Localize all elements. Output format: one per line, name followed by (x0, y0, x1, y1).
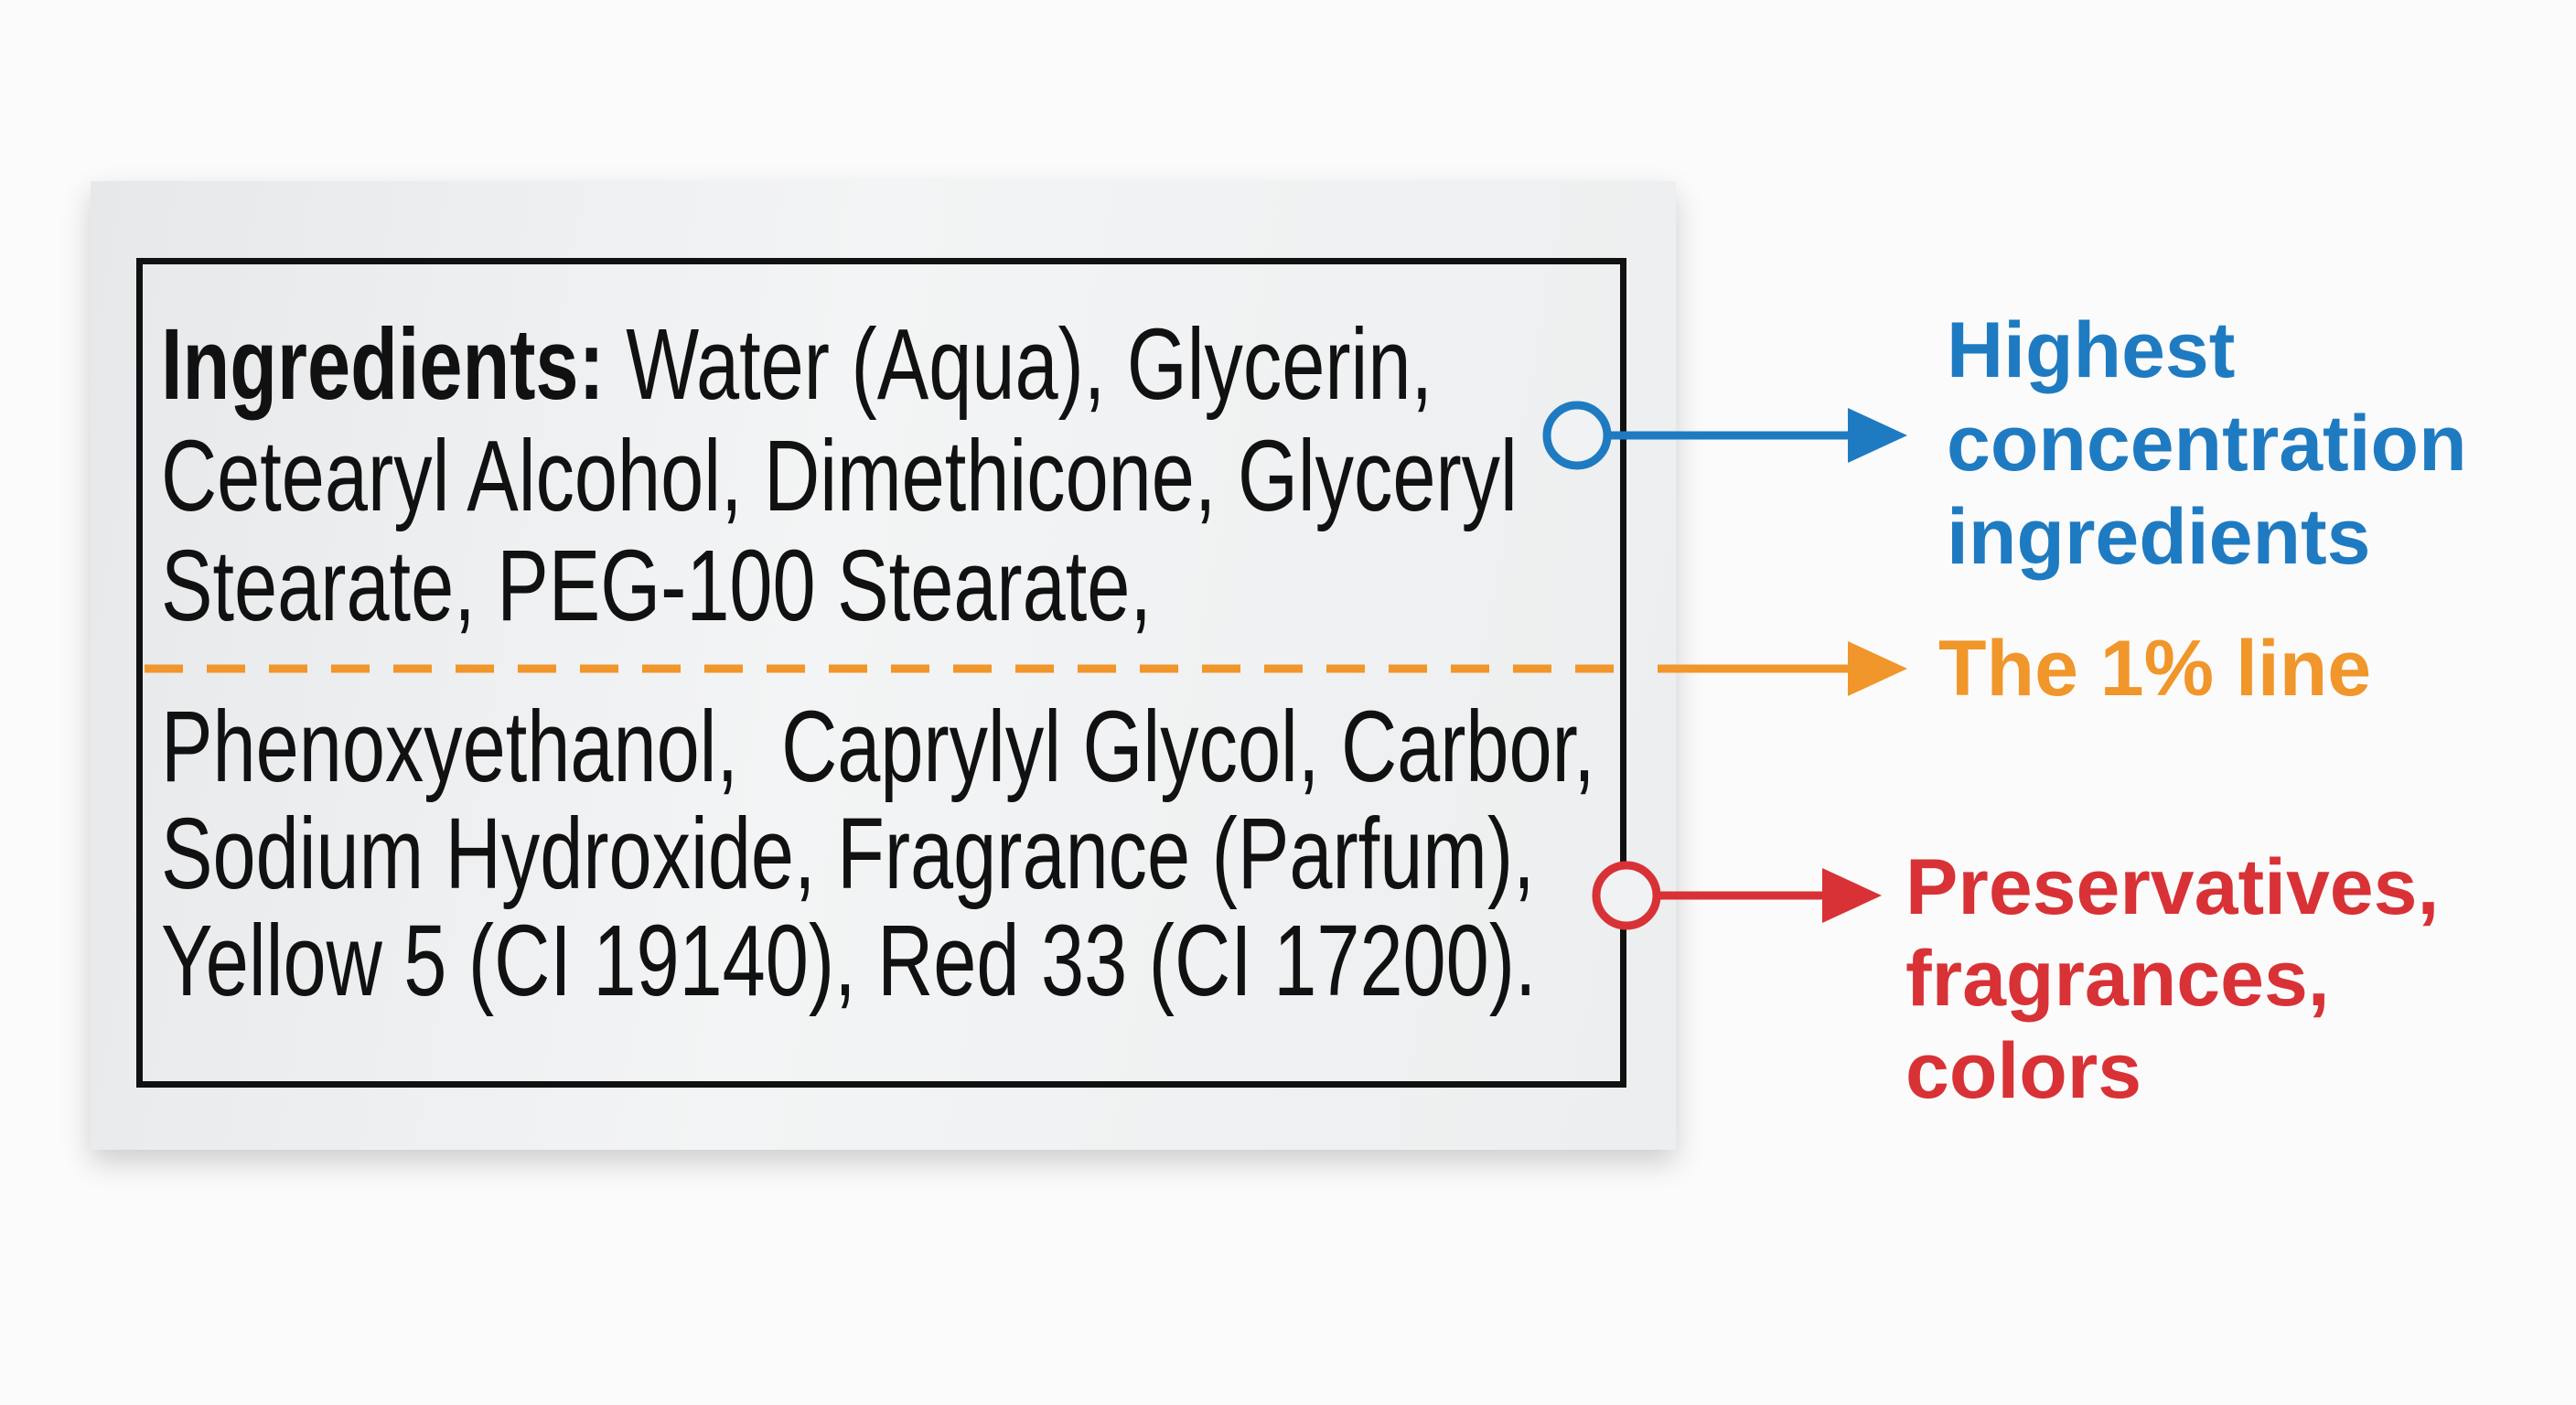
line 4: Phenoxyethanol, Caprylyl Glycol, Carbor, (161, 691, 1595, 803)
orange dashed 1% line with arrow (145, 641, 1907, 696)
line 1: Ingredients: Water (Aqua), Glycerin, (161, 308, 1433, 421)
line 5: Sodium Hydroxide, Fragrance (Parfum), (161, 798, 1535, 910)
ingredients text: lower section (161, 691, 1595, 1017)
blue marker arrow (1547, 405, 1907, 466)
ingredient label card (91, 181, 1676, 1150)
callout: preservatives (1905, 843, 2439, 1115)
callout: highest concentration (1947, 306, 2467, 581)
callout: the 1% line: The 1% line (1938, 625, 2371, 713)
line 6: Yellow 5 (CI 19140), Red 33 (CI 17200). (161, 905, 1537, 1017)
ingredients text: upper section (161, 308, 1518, 642)
callout: preservatives: Preservatives, (1905, 843, 2439, 931)
line 3: Stearate, PEG-100 Stearate, (161, 530, 1152, 642)
line 2: Cetearyl Alcohol, Dimethicone, Glyceryl (161, 420, 1518, 532)
callout: preservatives: fragrances, (1905, 935, 2330, 1023)
label border box (136, 258, 1626, 1088)
callout: highest concentration: Highest (1947, 306, 2235, 394)
red marker arrow (1596, 865, 1882, 926)
callout: highest concentration: concentration (1947, 400, 2467, 488)
callout: highest concentration: ingredients (1947, 493, 2371, 581)
callout: preservatives: colors (1905, 1027, 2141, 1115)
